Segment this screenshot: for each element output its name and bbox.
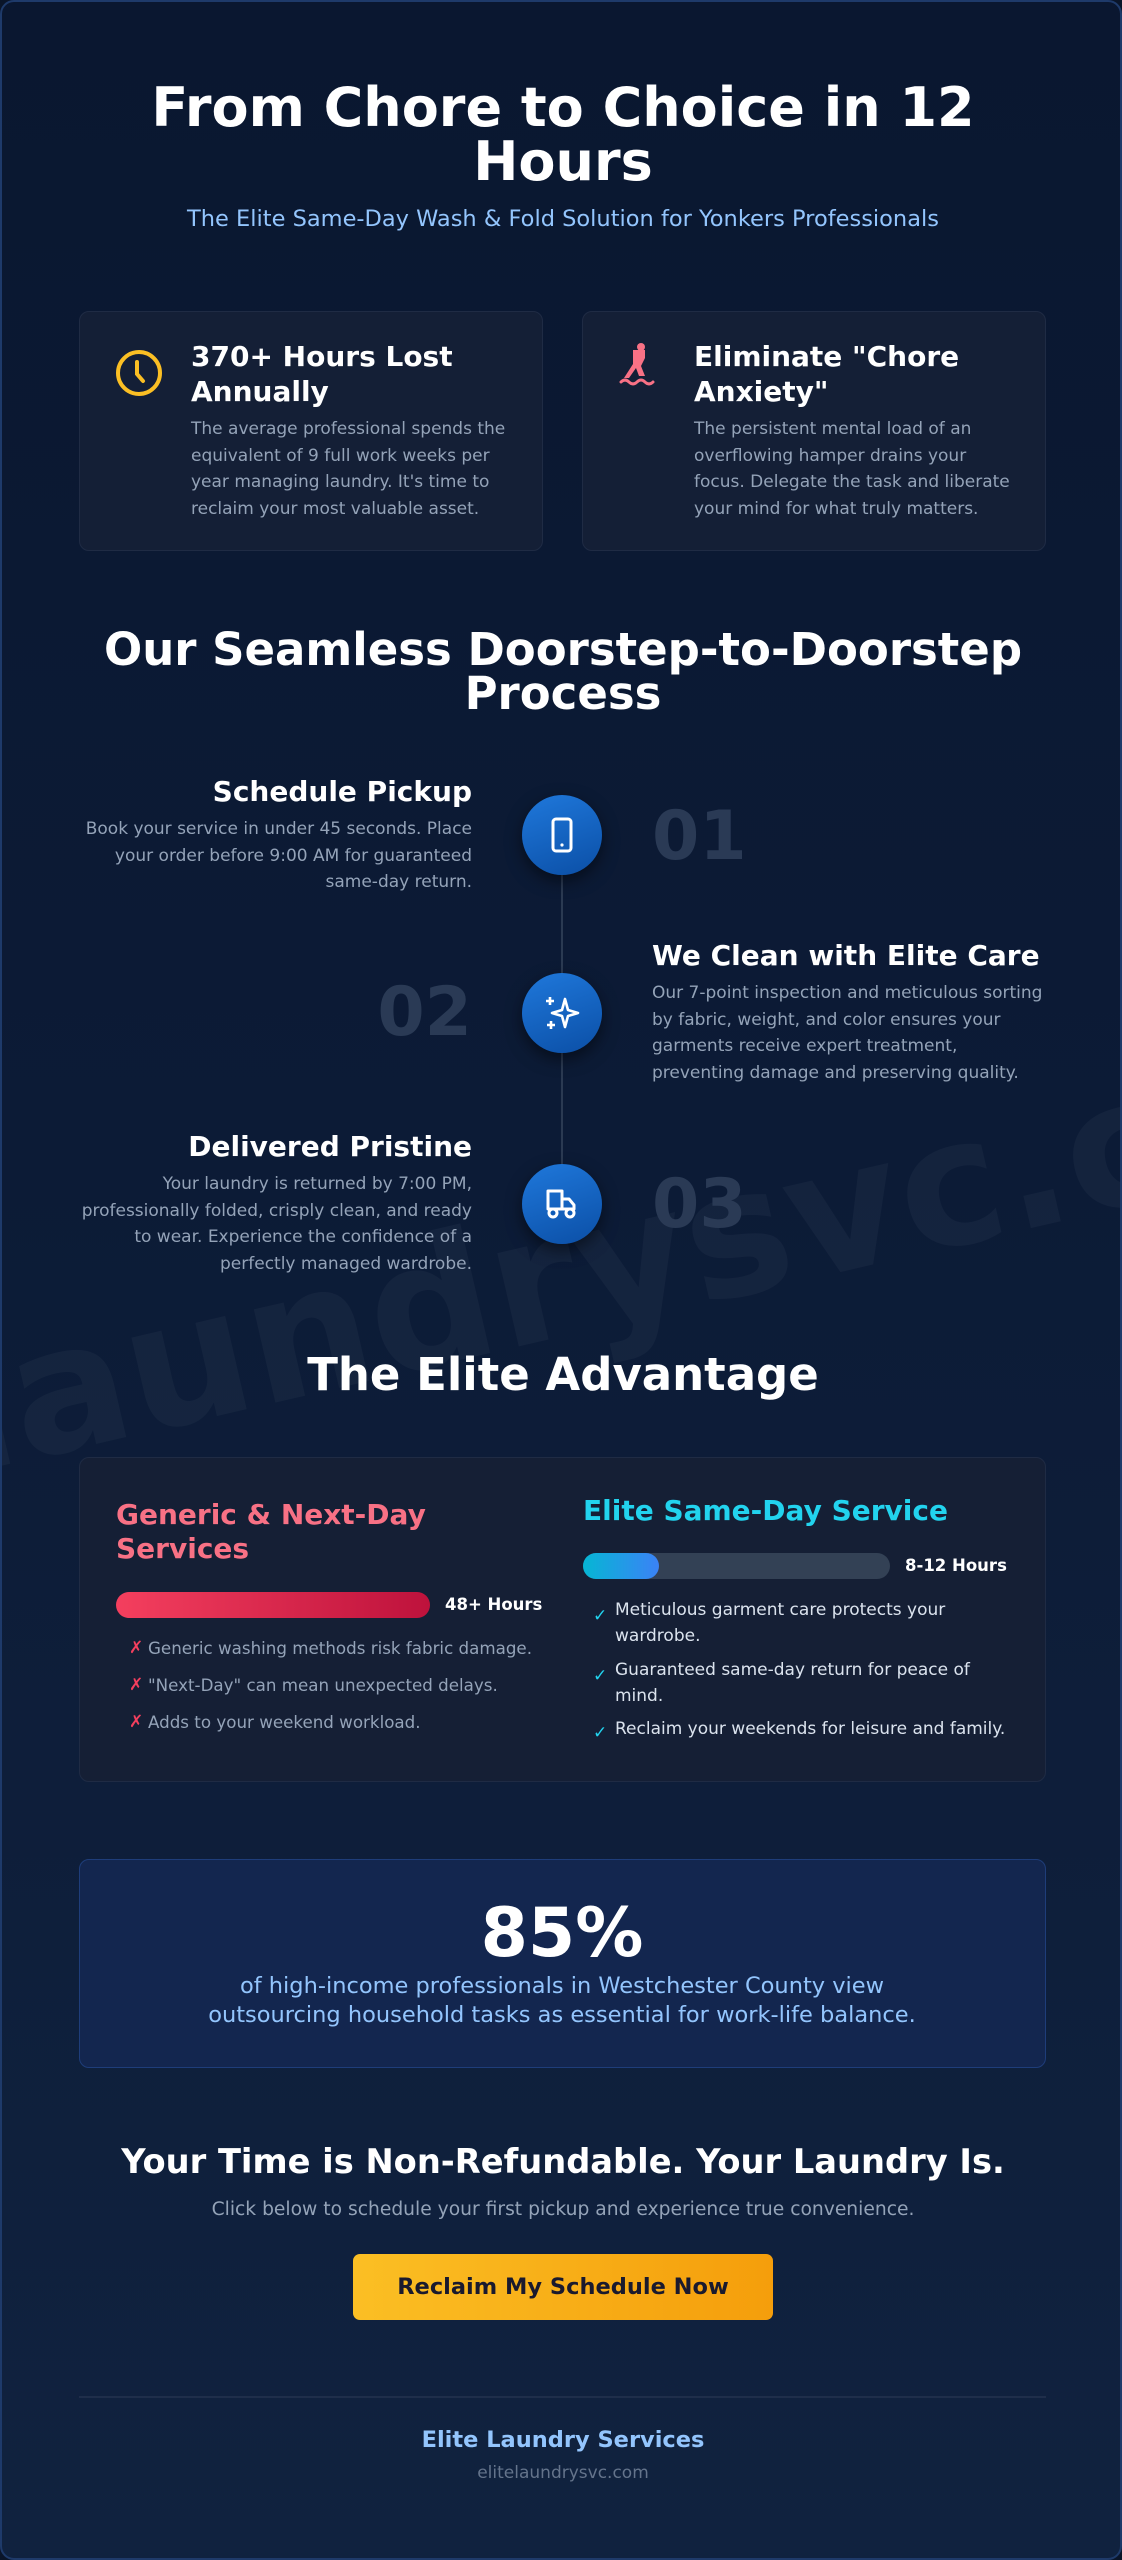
list: drawbacks: ✗ xyxy=(129,1712,143,1732)
heading xyxy=(694,340,959,408)
heading: Elite Same-Day Service xyxy=(583,1494,948,1527)
cta button: Reclaim My Schedule Now xyxy=(397,2274,729,2300)
stat text: outsourcing household tasks as essential for work-life balance. xyxy=(208,2002,916,2028)
list: benefits: ✓ xyxy=(593,1723,607,1743)
stat text xyxy=(208,1973,916,2028)
bar: 8-12 hours xyxy=(583,1553,1007,1579)
number 01: 01 xyxy=(652,797,747,876)
timeline xyxy=(82,775,1042,1274)
heading xyxy=(116,1498,426,1565)
icon: sparkles xyxy=(522,973,602,1053)
heading: process: Our Seamless Doorstep-to-Doorstep xyxy=(104,623,1022,676)
list: benefits: Guaranteed same-day return for peace of mind. xyxy=(615,1660,970,1706)
panel: comparison xyxy=(79,1457,1046,1782)
step 1 text: Book your service in under 45 seconds. Place your order before 9:00 AM for guaranteed same-day return. xyxy=(86,819,472,892)
icon: clock xyxy=(116,350,162,396)
list: benefits: ✓ xyxy=(593,1606,607,1626)
generic column xyxy=(116,1498,542,1732)
footer url: elitelaundrysvc.com xyxy=(477,2463,649,2483)
icon: delivery truck xyxy=(522,1164,602,1244)
step 2 text xyxy=(652,939,1042,1082)
elite column xyxy=(583,1494,1007,1743)
list: benefits: Reclaim your weekends for leisure and family. xyxy=(615,1719,1005,1739)
step 1 text: Schedule Pickup xyxy=(213,775,472,808)
heading: process xyxy=(104,623,1022,720)
heading: Generic & Next-Day xyxy=(116,1498,426,1531)
list: benefits xyxy=(593,1600,1005,1743)
subtitle: The Elite Same-Day Wash & Fold Solution for Yonkers Professionals xyxy=(187,206,939,232)
icon: phone xyxy=(522,795,602,875)
heading: Eliminate "Chore xyxy=(694,340,959,373)
list: drawbacks: ✗ xyxy=(129,1638,143,1658)
heading: Services xyxy=(116,1532,249,1565)
step 1 text xyxy=(86,775,472,892)
heading: Anxiety" xyxy=(694,375,828,408)
heading: process: Process xyxy=(465,667,661,720)
number 03: 03 xyxy=(652,1165,747,1244)
list: drawbacks: "Next-Day" can mean unexpected delays. xyxy=(148,1675,498,1695)
heading: 370+ Hours Lost xyxy=(191,340,453,373)
list: benefits: ✓ xyxy=(593,1666,607,1686)
heading: Annually xyxy=(191,375,329,408)
number 02: 02 xyxy=(377,973,472,1052)
heading: elite advantage: The Elite Advantage xyxy=(307,1348,819,1401)
step 2 text: We Clean with Elite Care xyxy=(652,939,1040,972)
heading xyxy=(191,340,453,408)
step 3 text: Your laundry is returned by 7:00 PM, professionally folded, crisply clean, and ready to wear. Experience the confidence of a perfectly managed wardrobe. xyxy=(82,1174,472,1274)
body text: The persistent mental load of an overflowing hamper drains your focus. Delegate the task and liberate your mind for what truly matters. xyxy=(694,419,1010,518)
stat text: of high-income professionals in Westchester County view xyxy=(240,1973,884,1999)
cta subtext: Click below to schedule your first pickup and experience true convenience. xyxy=(212,2199,914,2220)
icon: wading figure xyxy=(619,343,655,386)
panel: statistic xyxy=(79,1859,1046,2068)
cta button xyxy=(353,2254,773,2320)
title xyxy=(151,76,975,193)
bar: 48+ hours xyxy=(116,1592,542,1618)
step 3 text: Delivered Pristine xyxy=(188,1130,472,1163)
step 2 text: Our 7-point inspection and meticulous sorting by fabric, weight, and color ensures your garments receive expert treatment, preventing damage and preserving quality. xyxy=(652,983,1042,1082)
title: From Chore to Choice in 12 xyxy=(151,76,975,139)
cta heading: Your Time is Non-Refundable. Your Laundry Is. xyxy=(121,2142,1005,2181)
footer brand: Elite Laundry Services xyxy=(422,2427,704,2453)
list: drawbacks: Generic washing methods risk fabric damage. xyxy=(148,1638,532,1658)
panel: hours lost xyxy=(79,311,543,551)
step 3 text xyxy=(82,1130,472,1274)
bar: 48+ hours: 48+ Hours xyxy=(445,1595,542,1614)
list: benefits: Meticulous garment care protects your wardrobe. xyxy=(615,1600,945,1646)
title: Hours xyxy=(473,130,653,193)
bar: 8-12 hours: 8-12 Hours xyxy=(905,1556,1007,1575)
big number: 85% xyxy=(481,1894,643,1973)
list: drawbacks: Adds to your weekend workload. xyxy=(148,1712,421,1732)
panel: chore anxiety xyxy=(582,311,1046,551)
list: drawbacks: ✗ xyxy=(129,1675,143,1695)
body text: The average professional spends the equivalent of 9 full work weeks per year managing laundry. It's time to reclaim your most valuable asset. xyxy=(191,419,505,518)
list: drawbacks xyxy=(129,1638,532,1732)
